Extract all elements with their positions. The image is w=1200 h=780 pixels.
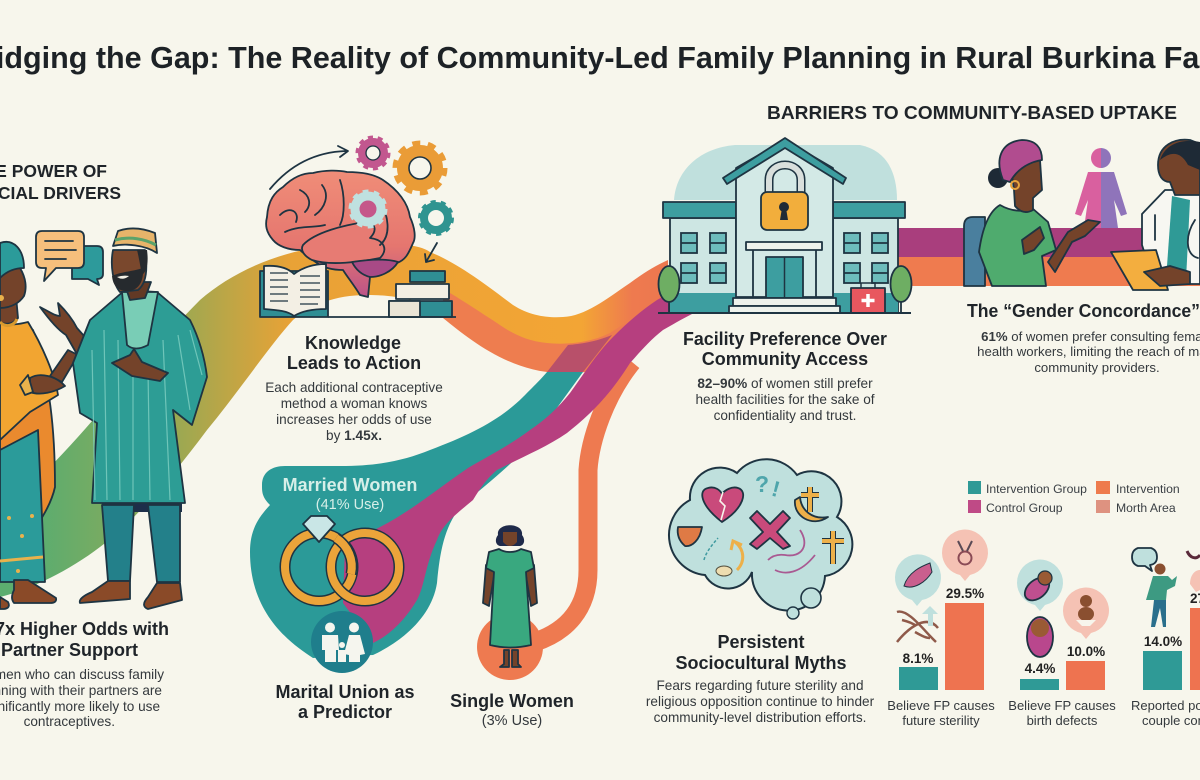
text block: gender concordance: The “Gender Concordance” bbox=[967, 301, 1200, 321]
text: single women: Single Women bbox=[450, 691, 574, 711]
man trousers bbox=[102, 505, 134, 581]
text block: knowledge leads to action: method a woman knows bbox=[281, 396, 427, 411]
legend: Control Group bbox=[986, 501, 1063, 515]
icon: speech bubbles bbox=[36, 231, 103, 285]
woman necklace bbox=[0, 319, 17, 326]
woman cuff bbox=[20, 375, 33, 395]
legend: Intervention bbox=[1116, 482, 1180, 496]
open book bbox=[260, 264, 328, 317]
stream: orange lower knowledge band bbox=[443, 264, 668, 373]
icon: marriage rings and diamond bbox=[285, 516, 399, 601]
doctor scrubs bbox=[1166, 196, 1190, 280]
icon: swaddled baby tilted bbox=[1020, 573, 1054, 605]
cloud bbox=[669, 459, 852, 611]
arrow to gear bbox=[270, 146, 348, 189]
text block: persistent sociocultural myths: Sociocultural Myths bbox=[675, 653, 847, 673]
text block: persistent sociocultural myths: community-level distribution efforts. bbox=[654, 710, 866, 725]
arrow to books bbox=[425, 243, 437, 262]
wing roofs bbox=[663, 202, 736, 218]
text block: persistent sociocultural myths: Persistent bbox=[717, 632, 805, 652]
icon: single woman on orange circle bbox=[477, 525, 543, 680]
man sandals bbox=[80, 581, 130, 603]
illustration: gender concordance consultation bbox=[964, 140, 1200, 290]
man smile bbox=[117, 276, 129, 279]
portico bbox=[746, 242, 822, 250]
stream: maroon overlap bbox=[547, 335, 612, 372]
stream: teal married women blob bbox=[250, 372, 583, 658]
bar chart: birth defects bbox=[1008, 560, 1116, 728]
text: marital union as a predictor: Marital Union as bbox=[275, 682, 415, 702]
icon: seated baby bbox=[1076, 595, 1096, 626]
text block: knowledge leads to action: increases her odds of use bbox=[276, 412, 432, 427]
value 4.4%: 4.4% bbox=[1025, 661, 1055, 676]
woman hand bbox=[30, 375, 65, 394]
illustration: brain with gears and books bbox=[260, 138, 456, 317]
woman earring bbox=[0, 295, 4, 301]
newborn face bbox=[1031, 619, 1049, 637]
cross right fill bbox=[822, 531, 844, 564]
icon: gourd bbox=[716, 566, 732, 576]
icon: mist strokes bbox=[704, 538, 718, 560]
icon: candy strand bbox=[904, 563, 932, 587]
man robe bbox=[73, 290, 207, 503]
windows bbox=[681, 233, 888, 283]
padlock bbox=[761, 165, 808, 230]
stack of books bbox=[389, 271, 452, 317]
value 8.1%: 8.1% bbox=[903, 651, 933, 666]
text block: knowledge leads to action: Each additional contraceptive bbox=[265, 380, 443, 395]
text block: facility preference: 82–90% of women still prefer bbox=[697, 376, 873, 391]
woman feet bbox=[12, 580, 56, 603]
text block: facility preference bbox=[683, 329, 887, 423]
doctor head bbox=[1158, 140, 1200, 195]
text block: partner support: contraceptives. bbox=[24, 714, 115, 729]
woman turban bbox=[0, 242, 24, 278]
bar 8.1% bbox=[899, 667, 938, 690]
icon: dark curved stroke bbox=[1187, 551, 1200, 558]
label: married women: Married Women bbox=[283, 475, 417, 495]
illustration: thought cloud of myths bbox=[669, 459, 852, 619]
doctor coat bbox=[1142, 190, 1200, 284]
bar 14.0% bbox=[1143, 651, 1182, 690]
text block: partner support: Partner Support bbox=[1, 640, 138, 660]
legend: Morth Area bbox=[1116, 501, 1176, 515]
icon: pink bubble fragment bbox=[1190, 570, 1200, 592]
trees bbox=[658, 266, 912, 313]
bar 4.4% bbox=[1020, 679, 1059, 690]
bar chart: future sterility bbox=[887, 530, 995, 728]
bar chart: couple communication bbox=[1131, 548, 1200, 728]
text block: knowledge leads to action: Knowledge bbox=[305, 333, 401, 353]
text block: knowledge leads to action: Leads to Action bbox=[287, 353, 421, 373]
caption: Believe FP causes bbox=[1008, 698, 1116, 713]
woman neck and face bbox=[0, 296, 18, 324]
illustration: man talking bbox=[40, 228, 207, 609]
illustration: health facility with padlock bbox=[658, 138, 912, 313]
stethoscope bbox=[1155, 215, 1198, 258]
stream: right orange band bbox=[880, 257, 1200, 286]
icon: question and exclamation: ? bbox=[755, 471, 769, 497]
text block: facility preference: confidentiality and trust. bbox=[714, 408, 856, 423]
icon: dna helix bbox=[897, 612, 938, 642]
cross right bbox=[822, 531, 844, 564]
value 29.5%: 29.5% bbox=[946, 586, 984, 601]
woman skirt bbox=[0, 430, 45, 582]
brain bbox=[266, 171, 415, 297]
base line bbox=[328, 316, 456, 318]
bar 27% bbox=[1190, 608, 1200, 690]
text block: knowledge leads to action: by 1.45x. bbox=[326, 428, 382, 443]
gold gear bbox=[395, 143, 445, 193]
label: married women: (41% Use) bbox=[316, 497, 384, 513]
icon: teal bubble bbox=[895, 554, 941, 606]
icon: up arrow bbox=[922, 606, 938, 626]
label: married women bbox=[283, 475, 417, 513]
caption: Believe FP causes bbox=[887, 698, 995, 713]
diamond bbox=[303, 516, 335, 542]
roof bbox=[723, 138, 846, 184]
stream: right magenta band bbox=[880, 228, 1200, 257]
teal gear bbox=[420, 202, 452, 234]
value 14.0%: 14.0% bbox=[1144, 634, 1182, 649]
first aid kit bbox=[851, 283, 885, 313]
patient hands bbox=[1022, 220, 1100, 272]
text block: facility preference: Facility Preference Over bbox=[683, 329, 887, 349]
heading: barriers: BARRIERS TO COMMUNITY-BASED UPTAKE bbox=[767, 102, 1177, 123]
legend: Intervention Group bbox=[986, 482, 1087, 496]
cross upper bbox=[801, 487, 819, 512]
man hair bbox=[137, 250, 148, 275]
man head bbox=[112, 250, 146, 292]
icon: pink bubble bbox=[1063, 588, 1109, 639]
thought bubbles bbox=[801, 588, 821, 608]
stream: magenta bbox=[343, 280, 692, 643]
text block: knowledge leads to action bbox=[265, 333, 443, 443]
heading: the power of social drivers bbox=[0, 161, 121, 203]
text block: facility preference: Community Access bbox=[702, 349, 868, 369]
caption second line: future sterility bbox=[902, 713, 980, 728]
icon: broken heart bbox=[702, 487, 743, 522]
text block: persistent sociocultural myths: Fears regarding future sterility and bbox=[656, 678, 864, 693]
ground line bbox=[658, 312, 911, 314]
cross upper fill bbox=[801, 487, 819, 512]
text: marital union as a predictor bbox=[275, 682, 415, 722]
icon: teal bubble bbox=[1017, 560, 1063, 611]
brain cerebellum bbox=[352, 260, 398, 277]
icon: family circle bbox=[311, 611, 373, 673]
central block bbox=[736, 140, 833, 297]
icon: squiggle arrows bbox=[768, 530, 815, 573]
man underlay bbox=[102, 498, 182, 512]
baby head bbox=[1038, 571, 1052, 585]
value 10.0%: 10.0% bbox=[1067, 644, 1105, 659]
brain lower lobe bbox=[302, 222, 384, 263]
icon: pink bubble bbox=[942, 530, 988, 581]
chair bbox=[964, 217, 985, 286]
text block: persistent sociocultural myths: religious opposition continue to hinder bbox=[646, 694, 875, 709]
man collar bbox=[122, 292, 158, 348]
icon: crescent and cross bbox=[795, 497, 828, 521]
clipboard bbox=[1111, 250, 1168, 290]
backdrop bbox=[674, 145, 897, 200]
icon: curved arrow bbox=[731, 541, 743, 570]
patient dress bbox=[979, 205, 1056, 286]
woman wrap bbox=[0, 330, 55, 566]
bar 10.0% bbox=[1066, 661, 1105, 690]
text block: persistent sociocultural myths bbox=[646, 632, 875, 725]
icon: ring charm bbox=[958, 552, 972, 564]
man raised hand bbox=[40, 303, 92, 356]
text block: facility preference: health facilities for the sake of bbox=[695, 392, 875, 407]
gender symbol bbox=[1075, 148, 1127, 228]
text block: gender concordance bbox=[967, 301, 1200, 375]
bar 29.5% bbox=[945, 603, 984, 690]
woman blouse bbox=[0, 322, 58, 440]
door bbox=[766, 257, 803, 298]
icon: speech bubble bbox=[1132, 548, 1157, 571]
patient bun bbox=[988, 168, 1008, 188]
sankey flow streams bbox=[0, 228, 1200, 658]
man neck bbox=[124, 282, 151, 300]
text: marital union as a predictor: a Predictor bbox=[298, 702, 392, 722]
text: single women: (3% Use) bbox=[482, 713, 542, 729]
doctor hand bbox=[1144, 266, 1190, 286]
text block: gender concordance: community providers. bbox=[1034, 360, 1160, 375]
man cap bbox=[113, 228, 157, 253]
icon: person talking bbox=[1146, 564, 1177, 627]
steps bbox=[733, 298, 836, 306]
illustration: woman talking bbox=[0, 242, 78, 609]
legend bbox=[968, 481, 1180, 515]
woman forearm bbox=[50, 350, 78, 382]
small magenta gear bbox=[358, 138, 388, 168]
man chest hand bbox=[112, 349, 168, 381]
text: single women bbox=[450, 691, 574, 729]
text block: partner support bbox=[0, 619, 169, 729]
icon: swaddled newborn bbox=[1027, 617, 1053, 657]
stream: thin orange from single women bbox=[535, 362, 632, 642]
patient head bbox=[1010, 160, 1042, 212]
man beard bbox=[112, 268, 143, 291]
brain gear bbox=[351, 192, 385, 226]
caption second line: birth defects bbox=[1027, 713, 1098, 728]
exclamation mark: ! bbox=[769, 476, 783, 502]
wings bbox=[670, 218, 736, 313]
icon: large X bbox=[750, 511, 790, 549]
icon: small charm bbox=[678, 527, 702, 546]
patient turban bbox=[999, 140, 1042, 182]
patient earring bbox=[1011, 181, 1019, 189]
stream: partner support and knowledge band bbox=[0, 243, 668, 597]
